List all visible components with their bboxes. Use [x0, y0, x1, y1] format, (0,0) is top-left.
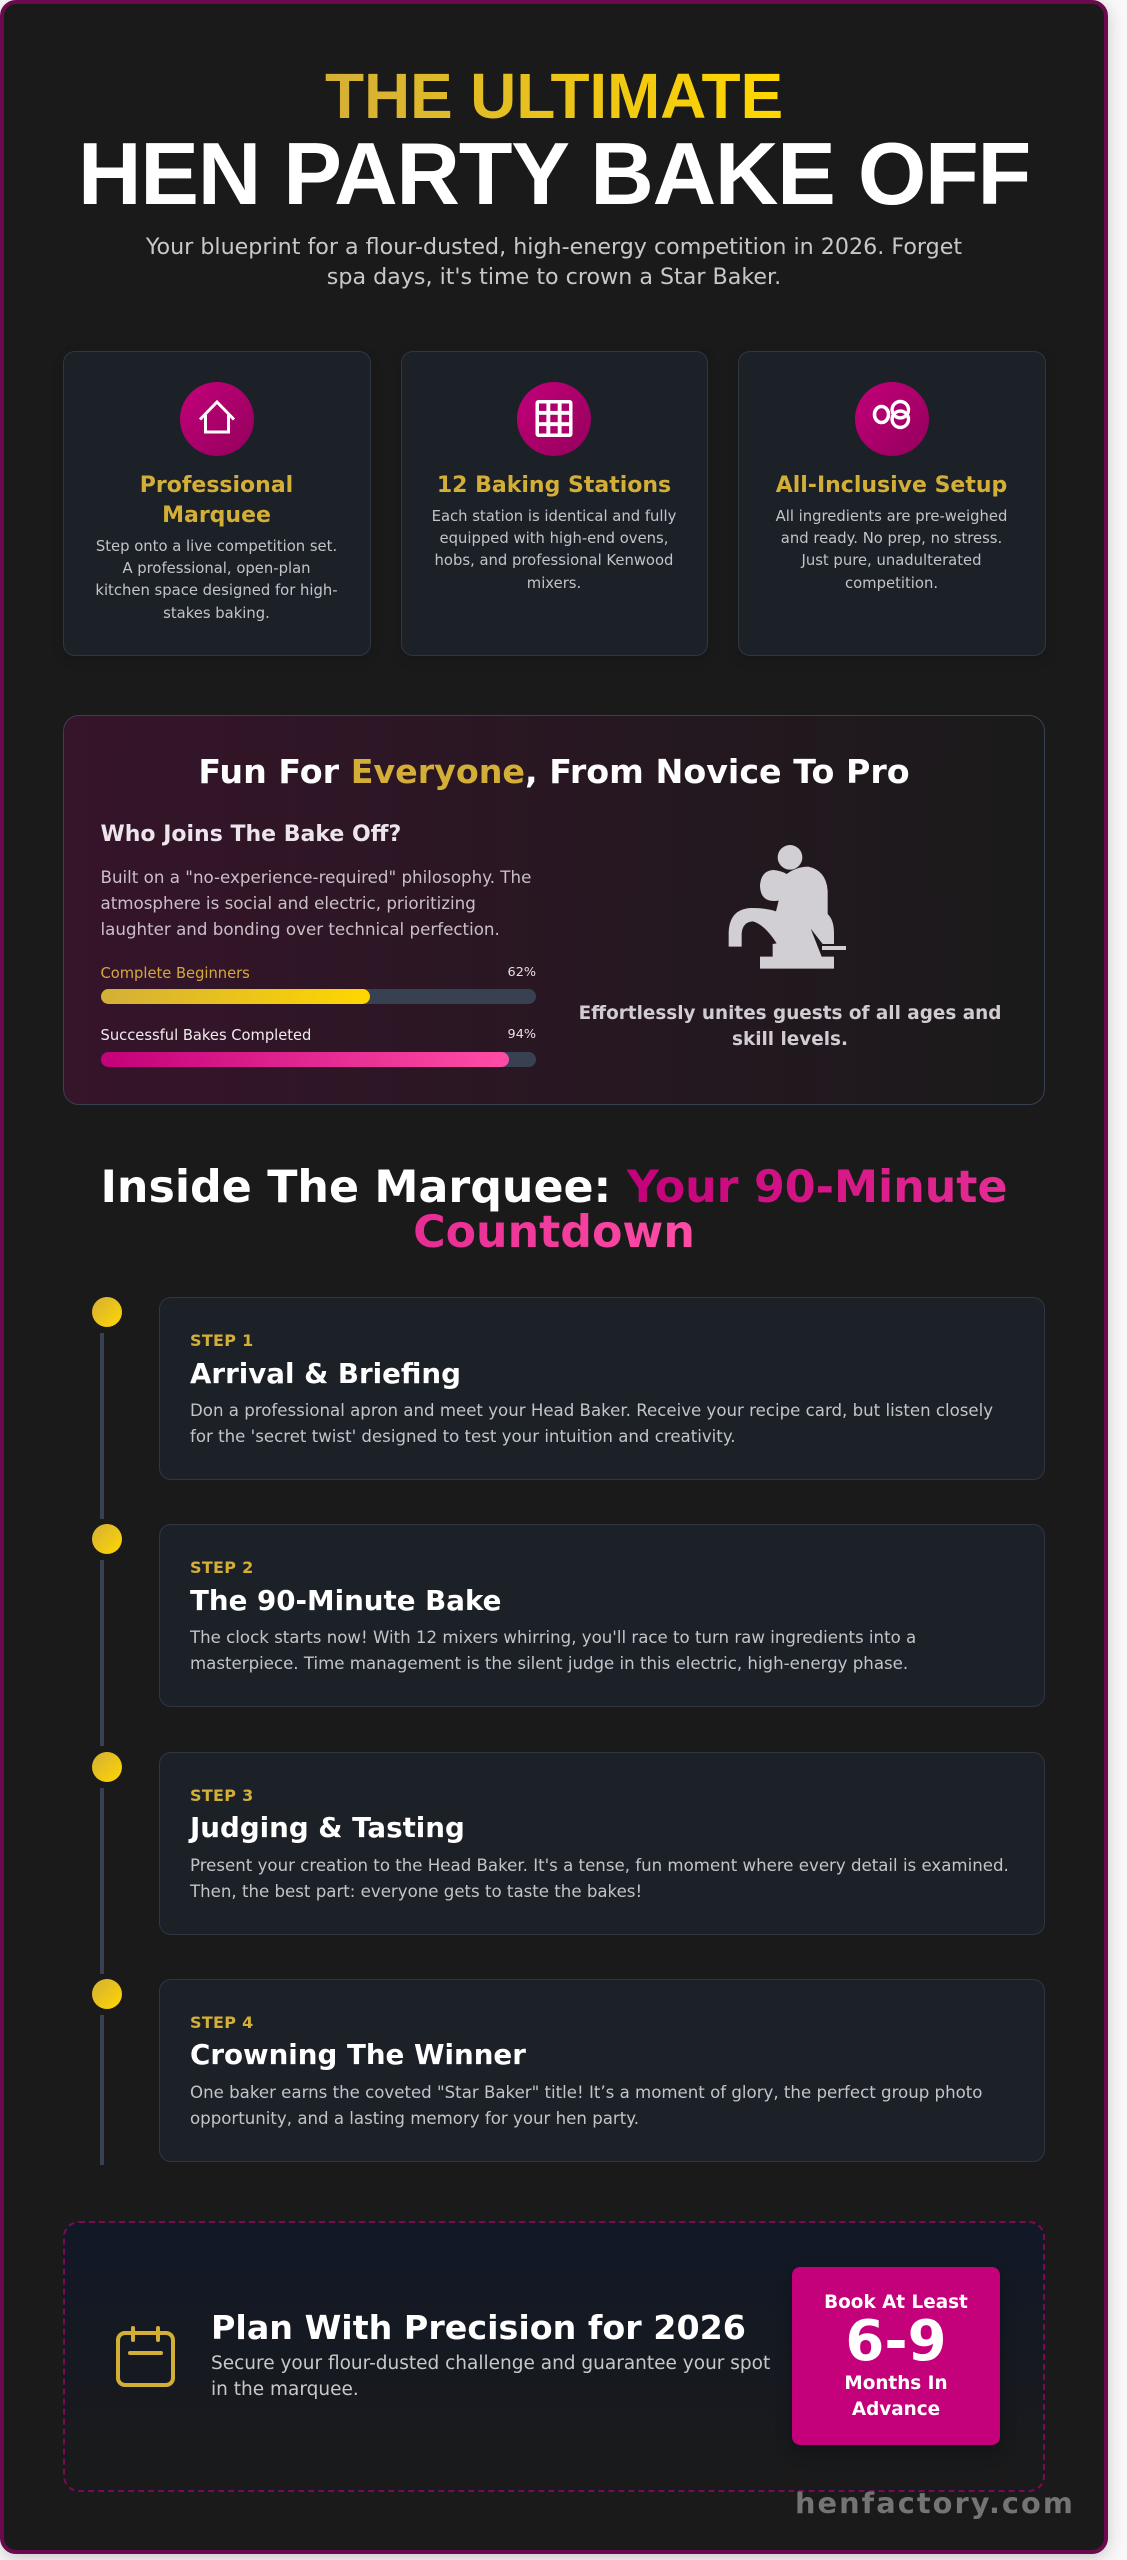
heading: inside the marquee [100, 1162, 1008, 1258]
text: professional marquee: A professional, open-plan [122, 560, 311, 577]
heading: professional marquee: Marquee [162, 502, 271, 528]
title: hen party bake off: HEN PARTY BAKE OFF [78, 124, 1030, 223]
heading: all-inclusive setup: All-Inclusive Setup [776, 472, 1007, 498]
timeline line 4 [100, 2015, 104, 2165]
heading: inside the marquee: Inside The Marquee: Your 90-Minute [100, 1162, 1008, 1213]
text: professional marquee: kitchen space designed for high- [95, 582, 338, 599]
callout bottom line [844, 2373, 948, 2420]
subtitle: Your blueprint for a flour-dusted, high-energy competition in 2026. Forget [146, 234, 962, 260]
cta text: Secure your flour-dusted challenge and guarantee your spot [211, 2353, 770, 2374]
callout: book at least [792, 2267, 1000, 2445]
step 2 label: STEP 2 [190, 1558, 254, 1577]
icon: grid [517, 382, 591, 456]
text: philosophy: laughter and bonding over technical perfection. [100, 919, 500, 939]
step 2 text [190, 1628, 916, 1673]
panel: step 1 [159, 1297, 1045, 1480]
heading: inside the marquee: Countdown [413, 1207, 695, 1258]
text: baking stations: mixers. [527, 575, 581, 592]
text: all-inclusive setup: competition. [845, 575, 938, 592]
value: 62 percent: 62% [508, 965, 536, 980]
caption: unites guests: skill levels. [732, 1029, 848, 1050]
icon: bakers silhouette [728, 845, 846, 969]
title: the ultimate: THE ULTIMATE [325, 60, 783, 132]
callout top line: Book At Least [824, 2292, 968, 2313]
panel: all-inclusive setup [738, 351, 1046, 656]
subtitle [146, 234, 962, 290]
text: professional marquee: stakes baking. [163, 605, 270, 622]
panel: step 4 [159, 1979, 1045, 2162]
panel: step 2 [159, 1524, 1045, 1707]
timeline dot 4 [92, 1979, 122, 2009]
panel: step 3 [159, 1752, 1045, 1935]
text: all-inclusive setup [776, 508, 1007, 592]
text: professional marquee [95, 538, 338, 622]
heading: professional marquee [140, 472, 293, 528]
callout number: 6-9 [845, 2309, 947, 2374]
text: baking stations: equipped with high-end ovens, [440, 530, 668, 547]
step 1 text: for the 'secret twist' designed to test your intuition and creativity. [190, 1427, 736, 1446]
text: professional marquee: Step onto a live competition set. [96, 538, 337, 555]
step 1 label: STEP 1 [190, 1331, 254, 1350]
step 1 text [190, 1401, 993, 1446]
caption: unites guests [579, 1003, 1001, 1050]
step 3 label: STEP 3 [190, 1786, 254, 1805]
heading: professional marquee: Professional [140, 472, 293, 498]
panel: professional marquee [63, 351, 370, 656]
watermark: henfactory.com [795, 2486, 1075, 2520]
value: 94 percent: 94% [508, 1027, 536, 1042]
step 4 title: Crowning The Winner [190, 2038, 526, 2071]
timeline line 1 [100, 1333, 104, 1519]
heading: baking stations: 12 Baking Stations [437, 472, 671, 498]
callout bottom line: Months In [844, 2373, 948, 2394]
bar: complete beginners 62 [100, 989, 536, 1004]
step 2 title: The 90-Minute Bake [190, 1584, 501, 1617]
text: baking stations: hobs, and professional Kenwood [435, 552, 673, 569]
step 3 text: Present your creation to the Head Baker. It's a tense, fun moment where every detail is examined. [190, 1856, 1009, 1875]
panel: fun for everyone [63, 715, 1045, 1105]
timeline line 2 [100, 1560, 104, 1746]
step 4 label: STEP 4 [190, 2013, 254, 2032]
step 1 text: Don a professional apron and meet your Head Baker. Receive your recipe card, but listen closely [190, 1401, 993, 1420]
timeline dot 3 [92, 1752, 122, 1782]
timeline dot 1 [92, 1297, 122, 1327]
label: complete beginners: Complete Beginners [100, 965, 250, 982]
step 4 text: One baker earns the coveted "Star Baker" title! It’s a moment of glory, the perfect group photo [190, 2083, 982, 2102]
text: philosophy [100, 867, 531, 939]
icon: linked rings [855, 382, 929, 456]
text: all-inclusive setup: and ready. No prep, no stress. [781, 530, 1002, 547]
label: successful bakes: Successful Bakes Completed [100, 1027, 311, 1044]
panel: plan with precision [63, 2221, 1045, 2492]
text: baking stations: Each station is identical and fully [432, 508, 676, 525]
step 4 text: opportunity, and a lasting memory for your hen party. [190, 2109, 639, 2128]
step 3 title: Judging & Tasting [190, 1811, 465, 1844]
step 2 text: masterpiece. Time management is the silent judge in this electric, high-energy phase. [190, 1654, 908, 1673]
timeline line 3 [100, 1788, 104, 1974]
cta text: in the marquee. [211, 2379, 359, 2400]
cta text [211, 2353, 770, 2400]
text: all-inclusive setup: All ingredients are pre-weighed [776, 508, 1007, 525]
text: philosophy: atmosphere is social and electric, prioritizing [100, 893, 476, 913]
cta heading: Plan With Precision for 2026 [211, 2308, 746, 2347]
step 3 text [190, 1856, 1009, 1901]
subheading: who joins: Who Joins The Bake Off? [100, 822, 401, 847]
bar: successful bakes 94 [100, 1052, 536, 1067]
step 2 text: The clock starts now! With 12 mixers whirring, you'll race to turn raw ingredients into a [190, 1628, 916, 1647]
heading: fun for everyone: Fun For Everyone, From Novice To Pro [198, 752, 910, 791]
text: philosophy: Built on a "no-experience-required" philosophy. The [100, 867, 531, 887]
text: all-inclusive setup: Just pure, unadulterated [801, 552, 982, 569]
panel: baking stations [400, 351, 708, 656]
timeline dot 2 [92, 1524, 122, 1554]
callout bottom line: Advance [852, 2399, 940, 2420]
step 4 text [190, 2083, 982, 2128]
step 1 title: Arrival & Briefing [190, 1357, 461, 1390]
subtitle: spa days, it's time to crown a Star Baker. [327, 264, 781, 290]
icon: calendar [116, 2326, 175, 2387]
text: baking stations [432, 508, 676, 592]
icon: house [180, 382, 254, 456]
step 3 text: Then, the best part: everyone gets to taste the bakes! [190, 1882, 642, 1901]
caption: unites guests: Effortlessly unites guests of all ages and [579, 1003, 1001, 1024]
